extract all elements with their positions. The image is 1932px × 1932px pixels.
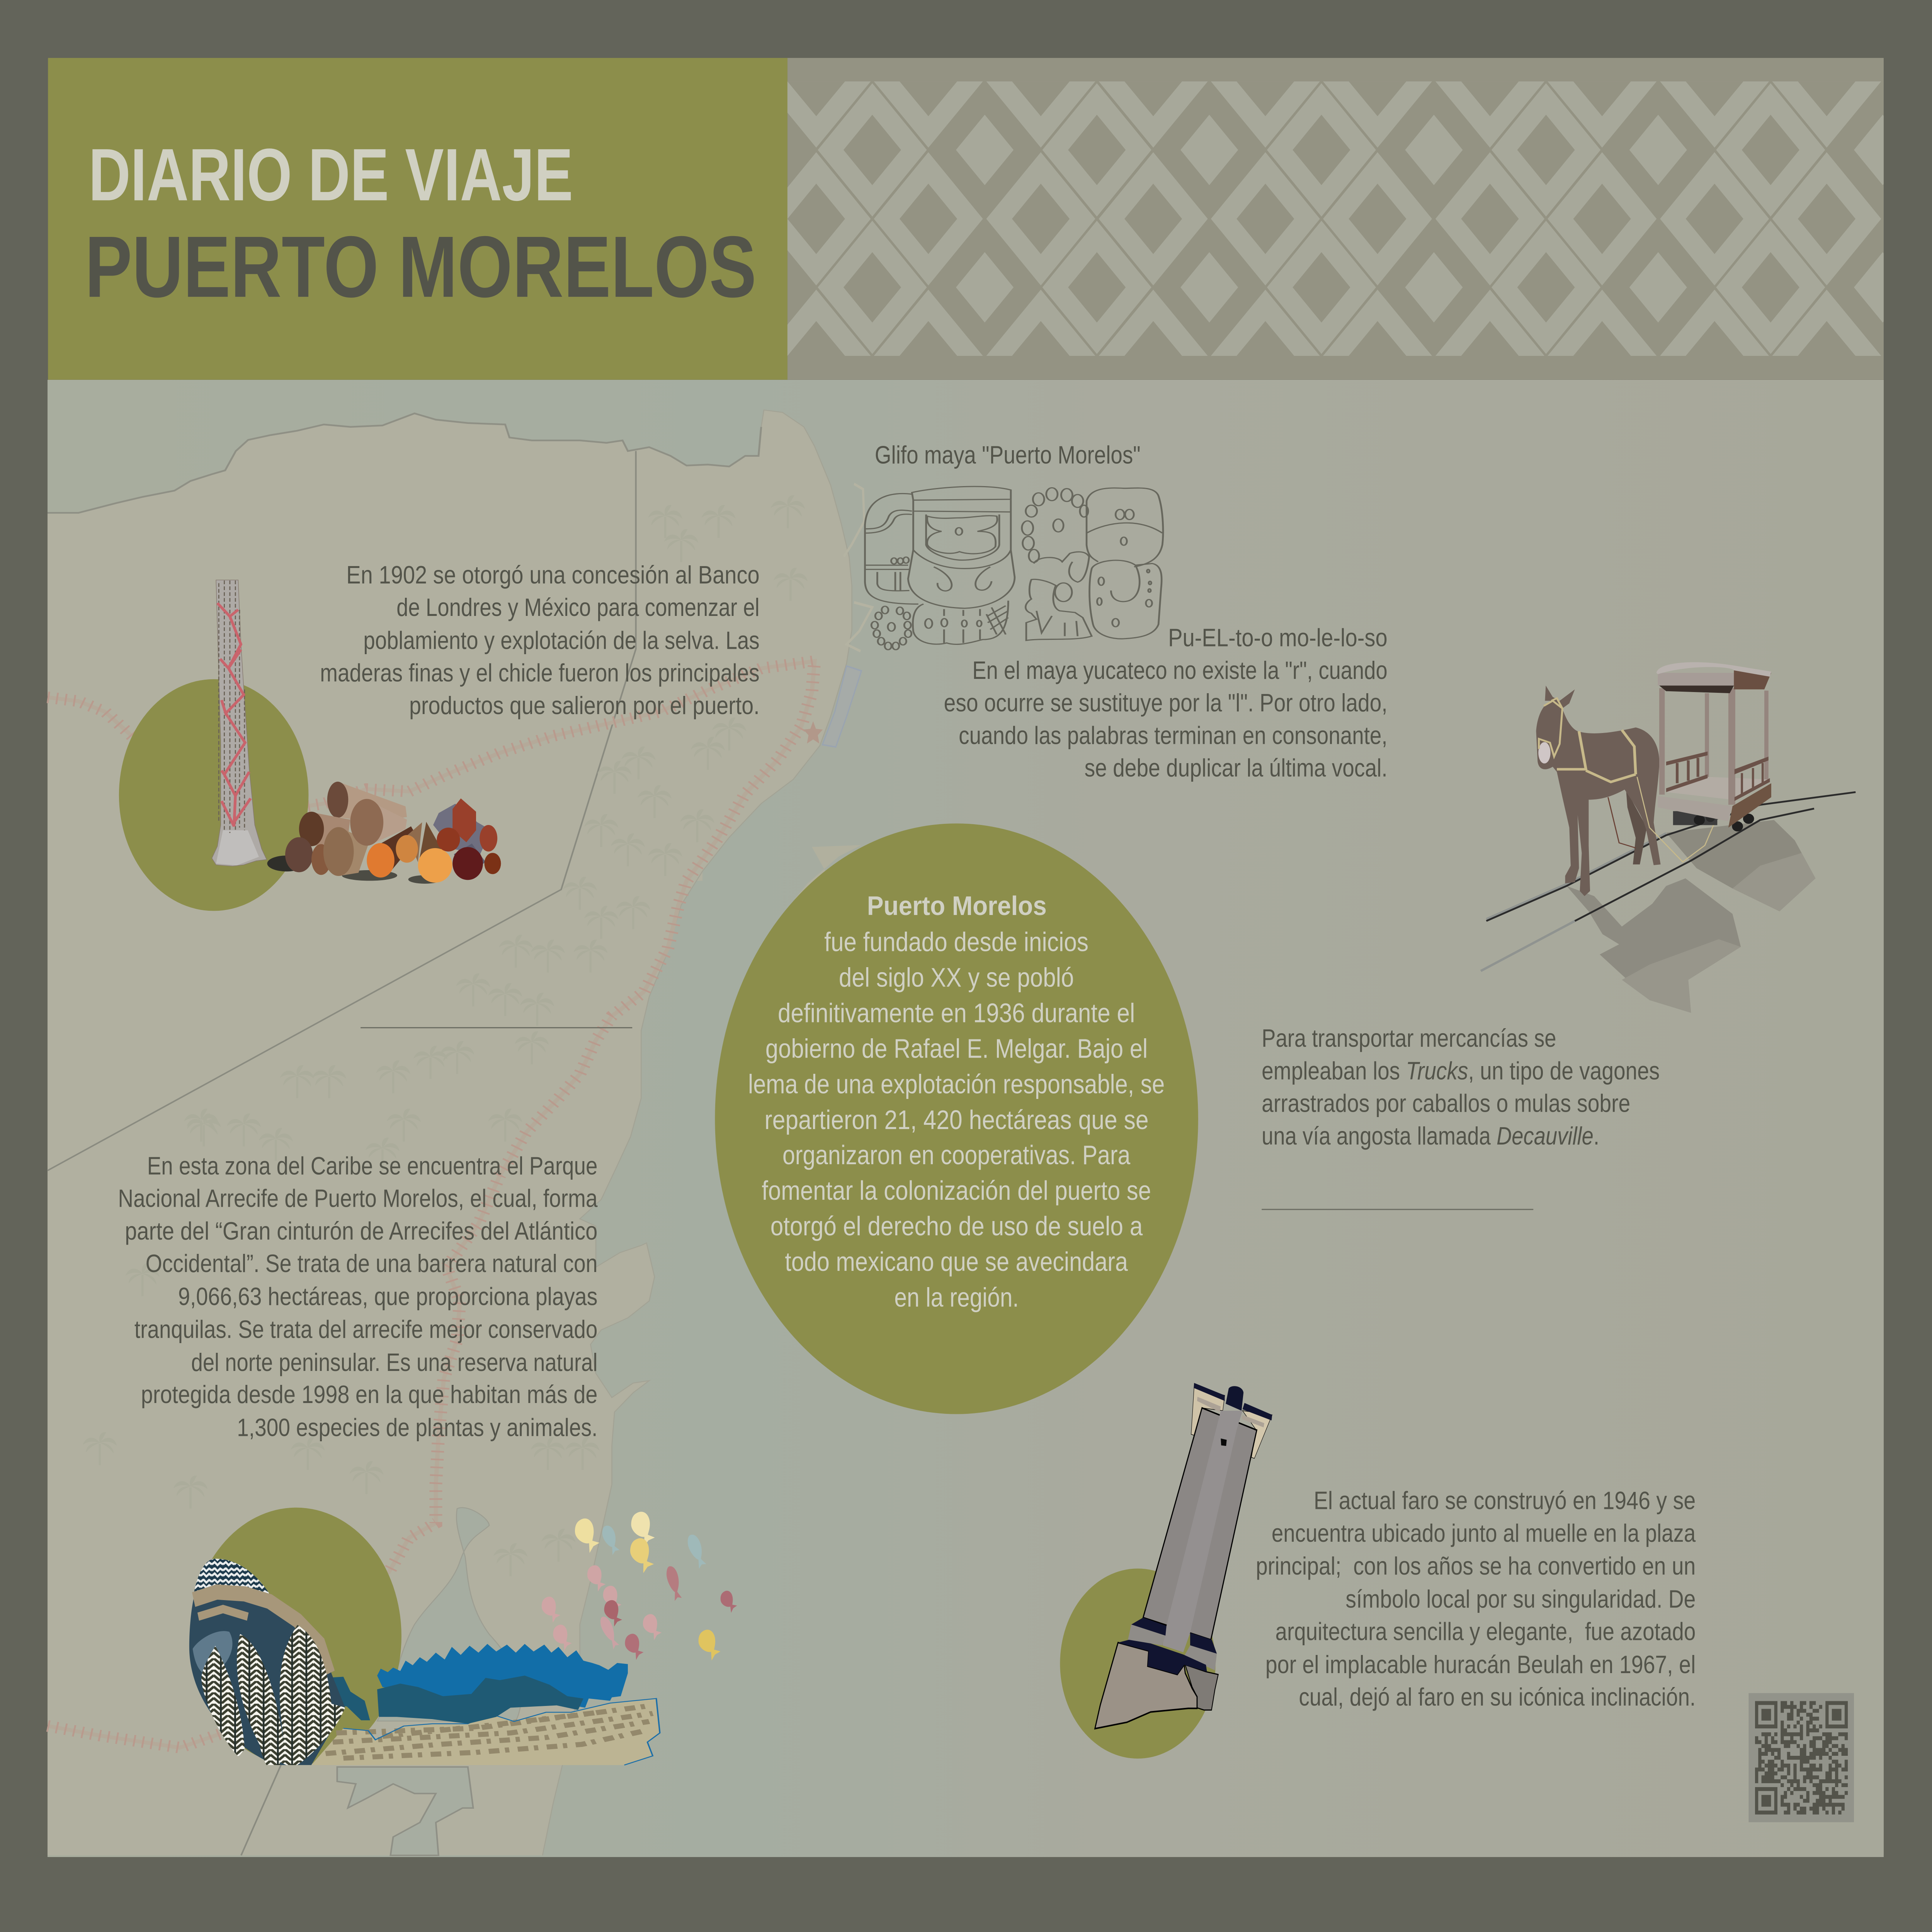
- text block: 1902 concession: de Londres y México para comenzar el: [396, 594, 760, 621]
- callout: Puerto Morelos circle: organizaron en cooperativas. Para: [782, 1140, 1131, 1170]
- callout: Puerto Morelos circle: en la región.: [894, 1282, 1019, 1313]
- text block: trucks: empleaban los Trucks, un tipo de vagones: [1262, 1057, 1660, 1085]
- map: northern islands: [844, 484, 872, 651]
- map: north coast line: [48, 413, 761, 513]
- text block: lighthouse: arquitectura sencilla y elegante, fue azotado: [1275, 1618, 1696, 1646]
- text block: lighthouse: [1256, 1487, 1696, 1711]
- text block: reef national park: Occidental”. Se trata de una barrera natural con: [146, 1250, 597, 1277]
- map: east coast line: [543, 410, 852, 1855]
- divider right: [1262, 1209, 1533, 1210]
- map: railway route band: [48, 661, 815, 1748]
- text block: Mayan phonetics: cuando las palabras terminan en consonante,: [959, 721, 1388, 750]
- callout: Puerto Morelos circle: fue fundado desde inicios: [824, 927, 1088, 957]
- text block: lighthouse: por el implacable huracán Beulah en 1967, el: [1265, 1651, 1696, 1679]
- callout: Puerto Morelos circle: repartieron 21, 420 hectáreas que se: [765, 1105, 1149, 1135]
- icon: chicle tree: [212, 580, 267, 866]
- divider left: [361, 1027, 632, 1028]
- callout: Puerto Morelos circle: lema de una explotación responsable, se: [748, 1069, 1165, 1099]
- icon: brain coral and sea fans: [189, 1559, 345, 1765]
- text block: reef national park: del norte peninsular. Es una reserva natural: [191, 1349, 597, 1376]
- olive circle behind tree: [119, 679, 308, 911]
- text block: lighthouse: cual, dejó al faro en su icónica inclinación.: [1299, 1683, 1696, 1711]
- text block: reef national park: tranquilas. Se trata del arrecife mejor conservado: [134, 1316, 597, 1344]
- text block: 1902 concession: En 1902 se otorgó una concesión al Banco: [346, 561, 760, 589]
- map: railway route ties: [48, 661, 815, 1748]
- text block: reef national park: En esta zona del Caribe se encuentra el Parque: [147, 1152, 597, 1180]
- icon: sand seabed: [311, 1699, 660, 1765]
- header: diamond pattern band: [762, 58, 1884, 380]
- text block: reef national park: [118, 1152, 598, 1442]
- callout: Puerto Morelos circle: todo mexicano que se avecindara: [785, 1247, 1128, 1277]
- title: Puerto Morelos: PUERTO MORELOS: [85, 218, 757, 315]
- panel: reef illustration: [189, 1507, 739, 1765]
- map: peninsula land north: [48, 410, 852, 881]
- icon: pile of logs: [267, 782, 501, 884]
- callout: Puerto Morelos circle: otorgó el derecho de uso de suelo a: [770, 1211, 1143, 1241]
- callout: Puerto Morelos circle: gobierno de Rafael E. Melgar. Bajo el: [765, 1034, 1148, 1064]
- text block: reef national park: 9,066,63 hectáreas, que proporciona playas: [178, 1282, 597, 1311]
- text block: 1902 concession: poblamiento y explotación de la selva. Las: [363, 626, 760, 655]
- text block: reef national park: parte del “Gran cinturón de Arrecifes del Atlántico: [125, 1217, 597, 1245]
- panel: sea background: [48, 380, 1884, 1857]
- olive circle behind reef: [191, 1508, 401, 1765]
- panel: lighthouse illustration: [1060, 1383, 1272, 1759]
- text block: lighthouse: símbolo local por su singularidad. De: [1345, 1585, 1696, 1613]
- text block: Mayan phonetics: En el maya yucateco no existe la "r", cuando: [972, 656, 1388, 684]
- text block: 1902 concession: [320, 561, 760, 719]
- olive circle behind lighthouse: [1060, 1568, 1216, 1759]
- text block: Mayan phonetics: eso ocurre se sustituye por la "l". Por otro lado,: [944, 689, 1388, 717]
- header: olive title block: [48, 58, 787, 380]
- callout: Puerto Morelos circle: [715, 823, 1198, 1414]
- icon: dark teal coral: [326, 1675, 583, 1724]
- text block: trucks: Para transportar mercancías se: [1262, 1024, 1556, 1052]
- callout: Puerto Morelos circle: Puerto Morelos: [867, 891, 1047, 921]
- text block: Mayan phonetics: se debe duplicar la última vocal.: [1085, 754, 1388, 782]
- map: Puerto Morelos star: [804, 721, 823, 743]
- map: reef area marker: [822, 666, 861, 747]
- map: peninsula land south: [48, 1344, 649, 1855]
- text block: reef national park: protegida desde 1998 en la que habitan más de: [141, 1381, 597, 1408]
- panel: tree and logs illustration: [119, 580, 501, 911]
- text block: trucks: arrastrados por caballos o mulas sobre: [1262, 1090, 1630, 1117]
- text block: lighthouse: encuentra ubicado junto al muelle en la plaza: [1272, 1519, 1696, 1547]
- map: palms: [83, 495, 808, 1576]
- callout: Puerto Morelos circle: definitivamente en 1936 durante el: [778, 998, 1135, 1028]
- map: peninsula land middle: [48, 871, 702, 1364]
- map: Cozumel island: [794, 845, 867, 947]
- text block: trucks: [1262, 1024, 1660, 1150]
- text block: 1902 concession: productos que salieron por el puerto.: [409, 692, 760, 719]
- text block: reef national park: 1,300 especies de plantas y animales.: [237, 1413, 597, 1442]
- map: state borders: [48, 451, 636, 1855]
- text block: trucks: una vía angosta llamada Decauville.: [1262, 1122, 1599, 1150]
- text block: 1902 concession: maderas finas y el chicle fueron los principales: [320, 659, 760, 687]
- map: lagoon south: [337, 1767, 473, 1855]
- QR code: [1748, 1693, 1854, 1822]
- text block: lighthouse: principal; con los años se ha convertido en un: [1256, 1552, 1696, 1580]
- icon: school of fish: [539, 1507, 739, 1662]
- icon: leaning lighthouse: [1095, 1383, 1272, 1729]
- map: inner bay: [377, 1508, 521, 1721]
- text block: Mayan phonetics: [944, 624, 1388, 782]
- icon: Mayan glyph Puerto Morelos: [865, 486, 1163, 650]
- text block: reef national park: Nacional Arrecife de Puerto Morelos, el cual, forma: [118, 1185, 598, 1213]
- icon: blue coral: [377, 1644, 628, 1710]
- heading: Mayan glyph: Glifo maya "Puerto Morelos": [875, 441, 1141, 469]
- icon: mule pulling a truck wagon: [1481, 662, 1855, 1013]
- map: land, coastline, borders and routes: [48, 410, 852, 1855]
- title: Diario de viaje: DIARIO DE VIAJE: [88, 133, 573, 216]
- text block: lighthouse: El actual faro se construyó en 1946 y se: [1314, 1487, 1696, 1515]
- callout: Puerto Morelos circle: fomentar la colonización del puerto se: [762, 1176, 1151, 1206]
- text block: Mayan phonetics: Pu-EL-to-o mo-le-lo-so: [1168, 624, 1388, 652]
- callout: Puerto Morelos circle: del siglo XX y se pobló: [839, 963, 1074, 993]
